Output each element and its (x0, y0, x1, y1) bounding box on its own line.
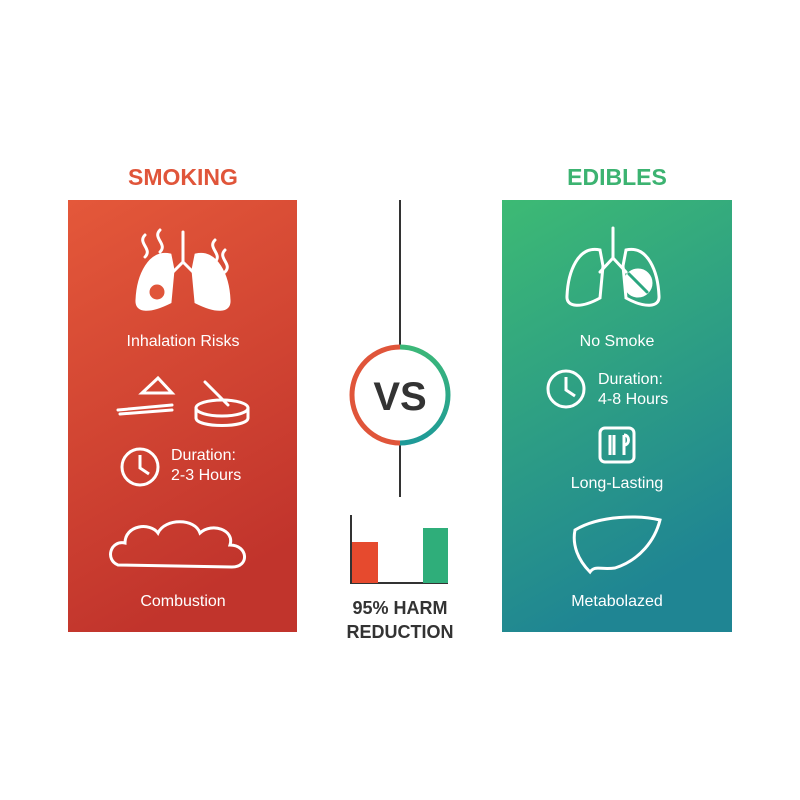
title: edibles: EDIBLES (567, 164, 667, 190)
icon: cloud (111, 522, 245, 567)
text: inhalation risks: Inhalation Risks (127, 333, 239, 350)
panel: edibles: 4-8 Hours (598, 391, 668, 408)
divider line (399, 200, 401, 497)
text: no smoke: No Smoke (580, 333, 654, 350)
text: harm reduction: 95% HARM (352, 598, 448, 618)
icon: liver (574, 517, 660, 572)
panel: edibles (502, 200, 732, 632)
text: harm reduction: REDUCTION (346, 622, 454, 642)
text: duration edibles: Duration: (598, 371, 663, 388)
title: smoking: SMOKING (128, 164, 238, 190)
text: harm reduction (346, 598, 454, 642)
icon: lungs no smoke (567, 228, 659, 305)
icon: lungs with smoke (137, 230, 229, 309)
text: long-lasting: Long-Lasting (571, 475, 663, 492)
bar chart (351, 515, 448, 583)
text: duration smoking: Duration: (171, 447, 236, 464)
vs circle: VS (373, 375, 427, 419)
text: metabolized: Metabolazed (571, 593, 663, 610)
panel: smoking: 2-3 Hours (171, 467, 241, 484)
icon: clock (122, 449, 158, 485)
icon: clock (548, 371, 584, 407)
icon: utensils (600, 428, 634, 462)
text: combustion: Combustion (140, 593, 226, 610)
panel: smoking (68, 200, 297, 632)
vs circle (352, 347, 448, 443)
icon: joint and ashtray (118, 378, 248, 426)
